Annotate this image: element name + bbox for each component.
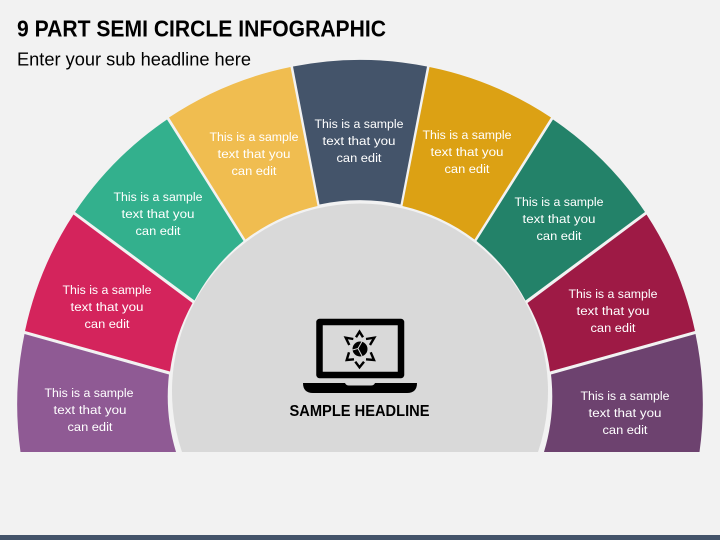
panel: segment 2 pink: can edit (84, 317, 130, 331)
panel: segment 4 yellow: can edit (232, 164, 277, 178)
panel: segment 7 green: can edit (536, 229, 582, 243)
panel: segment 4 yellow (169, 67, 318, 240)
panel: segment 3 teal: text that you (122, 207, 195, 221)
headline: SAMPLE HEADLINE (290, 403, 430, 420)
panel: segment 7 green (476, 120, 645, 300)
panel: segment 8 crimson: text that you (576, 304, 650, 318)
panel: segment 9 dark purple (544, 334, 703, 452)
subtitle: Enter your sub headline here (17, 50, 251, 70)
panel: segment 3 teal (75, 120, 244, 300)
panel: segment 2 pink: This is a sample (62, 283, 152, 297)
panel: segment 5 navy: text that you (322, 134, 396, 148)
icon: laptop (303, 322, 417, 393)
panel: segment 1 purple: This is a sample (44, 386, 134, 400)
panel: segment 8 crimson (528, 214, 695, 372)
panel: segment 1 purple (17, 334, 176, 452)
bottom bar (0, 535, 720, 540)
panel: segment 9 dark purple: This is a sample (580, 389, 670, 403)
panel: segment 9 dark purple: can edit (602, 423, 648, 437)
panel: segment 6 gold: This is a sample (422, 128, 512, 142)
panel: segment 3 teal: can edit (136, 224, 181, 238)
icon: star emblem (346, 332, 374, 367)
panel: center semicircle (172, 204, 548, 452)
panel: segment 5 navy (293, 60, 427, 204)
panel: segment 6 gold (402, 67, 551, 240)
panel: segment 4 yellow: This is a sample (210, 130, 299, 144)
panel: segment 2 pink (25, 214, 192, 372)
panel: segment 1 purple: text that you (54, 403, 127, 417)
panel: segment 9 dark purple: text that you (588, 406, 662, 420)
panel: segment 7 green: text that you (522, 212, 596, 226)
panel: segment 8 crimson: can edit (590, 321, 636, 335)
panel: segment 1 purple: can edit (68, 420, 113, 434)
panel: segment 4 yellow: text that you (218, 147, 291, 161)
panel: segment 7 green: This is a sample (514, 195, 604, 209)
panel: segment 8 crimson: This is a sample (568, 287, 658, 301)
panel: segment 6 gold: can edit (444, 162, 490, 176)
panel: segment 3 teal: This is a sample (114, 190, 203, 204)
panel: segment 2 pink: text that you (70, 300, 144, 314)
panel: segment 5 navy: can edit (336, 151, 382, 165)
title: 9 PART SEMI CIRCLE INFOGRAPHIC (17, 16, 386, 42)
panel: segment 6 gold: text that you (430, 145, 504, 159)
panel: segment 5 navy: This is a sample (314, 117, 404, 131)
